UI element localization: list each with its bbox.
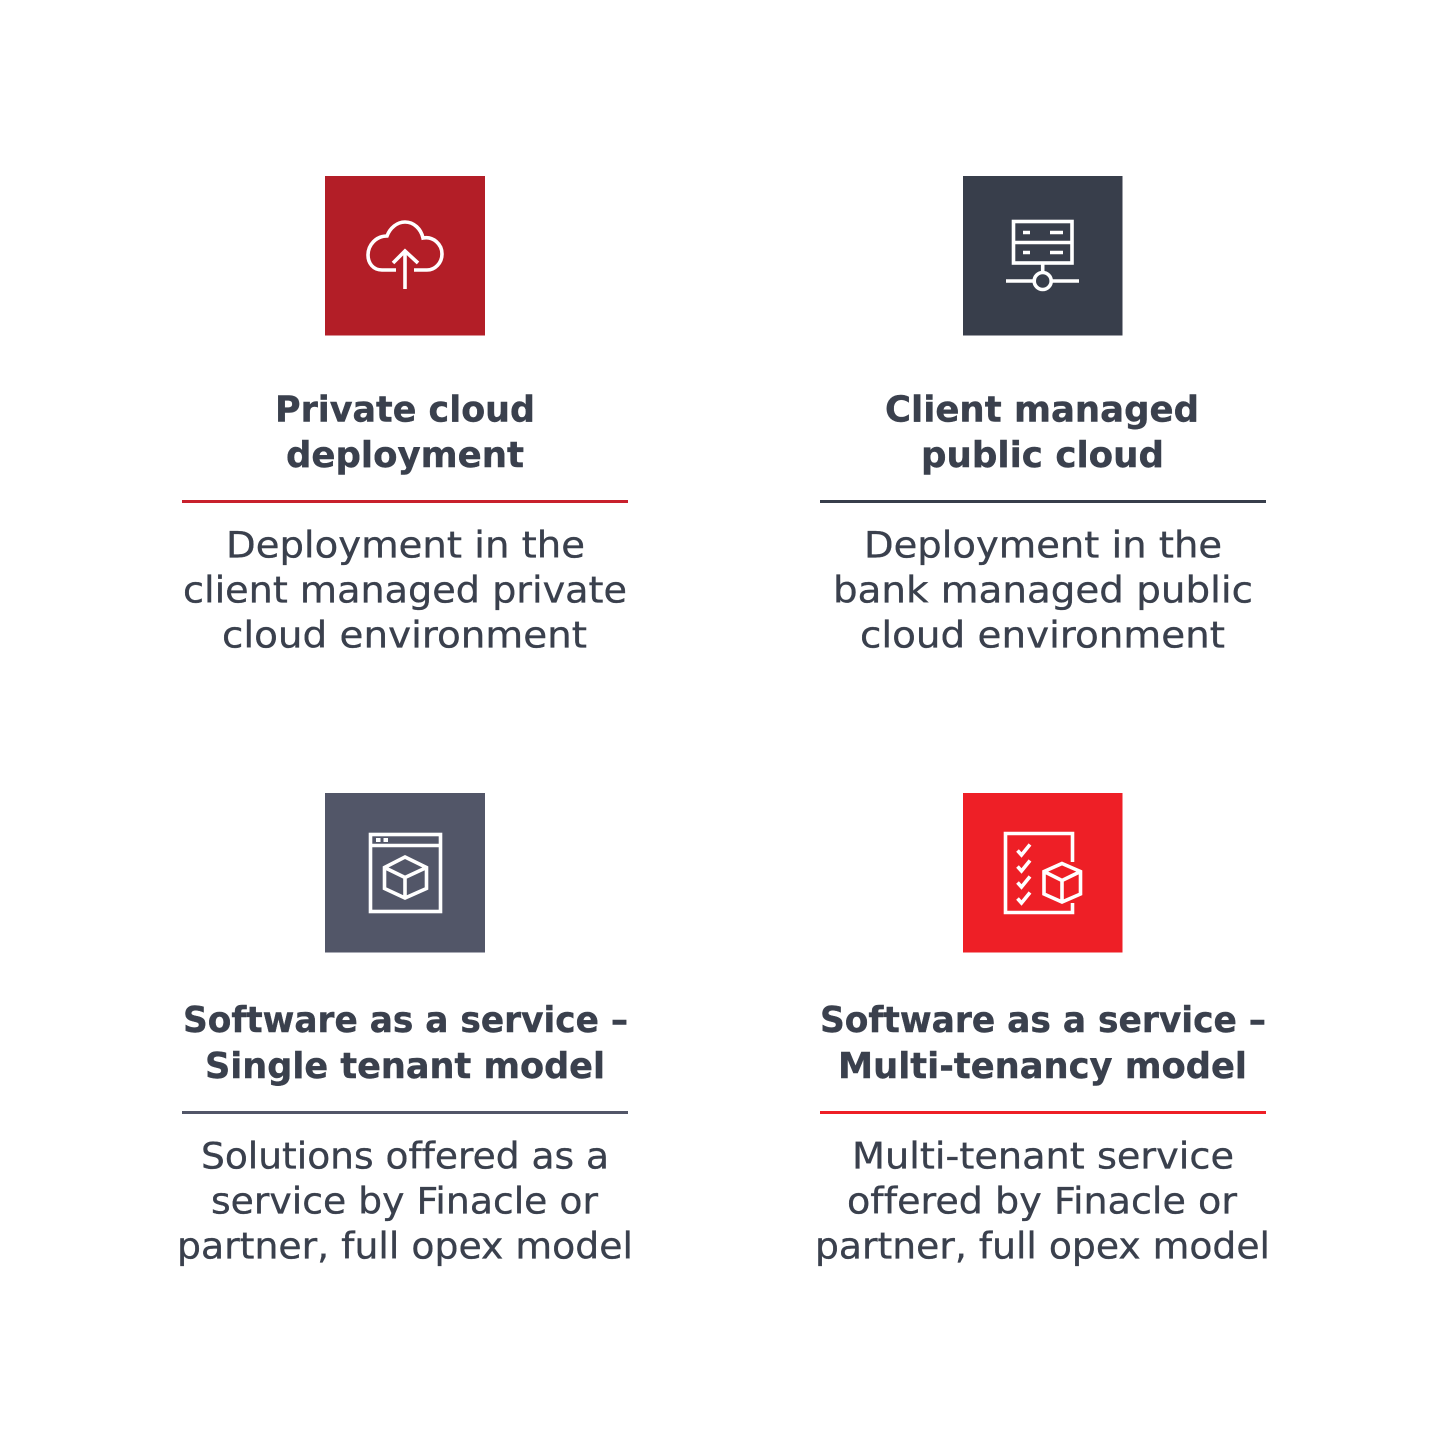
heading: single tenant model [183,1000,628,1087]
heading: private cloud deployment: deployment [286,435,524,476]
heading: client managed public cloud: Client managed [885,390,1199,430]
heading: multi-tenancy model: Multi-tenancy model [838,1046,1247,1087]
text: single tenant description: partner, full opex model [177,1224,633,1268]
text: private cloud description [183,524,627,656]
divider: charcoal rule [820,500,1266,503]
text: public cloud description: Deployment in the [864,524,1222,566]
divider: slate rule [182,1111,628,1114]
text: multi-tenancy description: partner, full opex model [815,1224,1270,1268]
text: private cloud description: client managed private [183,568,627,612]
text: public cloud description [833,524,1253,656]
panel: software as a service, single tenant [177,793,633,1268]
heading: private cloud deployment [275,390,535,476]
icon: cloud upload on dark red square [325,176,485,336]
panel: client managed public cloud [820,176,1266,656]
text: public cloud description: cloud environment [860,614,1225,656]
divider: red rule [182,500,628,503]
icon: server network on charcoal square [963,176,1122,336]
heading: multi-tenancy model: Software as a service – [820,1000,1266,1041]
text: multi-tenancy description [815,1134,1270,1268]
panel: software as a service, multi-tenancy [815,793,1270,1268]
text: multi-tenancy description: offered by Finacle or [847,1180,1237,1222]
text: private cloud description: cloud environment [222,614,587,656]
text: single tenant description: service by Finacle or [211,1180,598,1222]
heading: client managed public cloud: public cloud [921,435,1164,476]
text: single tenant description [177,1134,633,1268]
panel: private cloud deployment [182,176,628,656]
heading: single tenant model: Single tenant model [205,1046,605,1087]
heading: client managed public cloud [885,390,1199,476]
text: single tenant description: Solutions offered as a [201,1134,609,1178]
heading: single tenant model: Software as a service – [183,1000,628,1041]
text: multi-tenancy description: Multi-tenant service [852,1134,1234,1178]
heading: multi-tenancy model [820,1000,1266,1087]
heading: private cloud deployment: Private cloud [275,390,535,430]
text: public cloud description: bank managed public [833,568,1253,612]
icon: checklist with cube on bright red square [963,793,1122,952]
text: private cloud description: Deployment in the [226,524,585,566]
icon: browser window with cube on slate square [325,793,485,952]
divider: bright red rule [820,1111,1266,1114]
